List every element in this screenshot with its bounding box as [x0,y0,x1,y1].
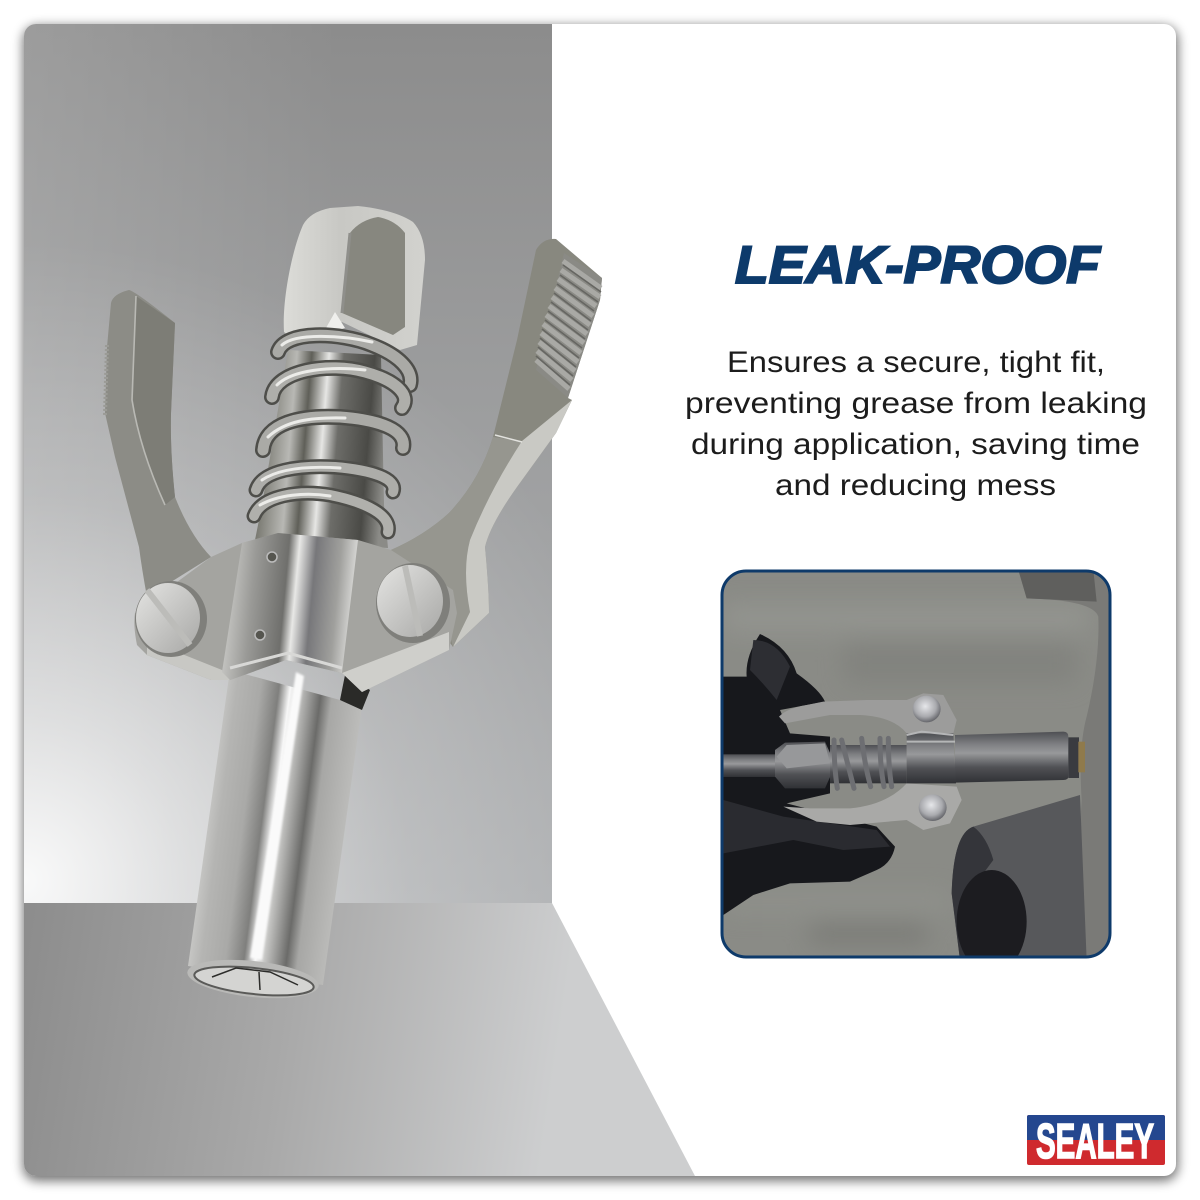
clamp block [134,533,457,692]
main tube [955,732,1068,783]
heading: LEAK-PROOF [735,236,1102,295]
left rivet [135,581,207,657]
upper lever [779,693,957,733]
wheel boss [952,795,1087,960]
hole: lower [255,630,265,640]
inner shaft [830,745,907,783]
body text: Ensures a secure, tight fit, [727,346,1105,379]
body text: during application, saving time [691,428,1140,461]
clamp band [907,733,956,783]
hole: upper [267,552,277,562]
pipe nut [775,742,832,788]
tube open end [185,954,321,1004]
wall light glow [24,365,534,903]
lower rivet [919,794,947,821]
body text: and reducing mess [775,469,1056,502]
body text: preventing grease from leaking [685,387,1147,420]
right lever [391,239,602,647]
logo red base [1027,1115,1165,1165]
glove [723,634,895,915]
photo background [722,571,1110,957]
logo: SEALEY [1027,1115,1165,1169]
compression spring [254,335,411,532]
nozzle tip [1068,737,1085,778]
hex nut [284,206,425,350]
left lever [105,290,211,597]
lever grip teeth [536,253,602,398]
lower lever [783,783,962,830]
hose pipe [723,754,777,777]
upper rivet [913,696,941,722]
inset photo: coupler in use [722,570,1110,973]
lower tube [185,670,370,1004]
upper shaft [255,350,388,548]
wheel bore [956,870,1027,956]
backdrop floor [24,903,695,1176]
right rivet [376,563,450,643]
bracket and hub [1052,574,1108,956]
logo blue top [1027,1115,1165,1140]
panel: studio backdrop [24,24,695,1176]
inset frame [722,571,1110,957]
product: grease coupler [105,206,602,1004]
backdrop wall [24,24,552,903]
spring [834,738,892,788]
body text [685,346,1147,502]
clamp centre band [222,533,358,680]
wall side light [24,24,174,602]
